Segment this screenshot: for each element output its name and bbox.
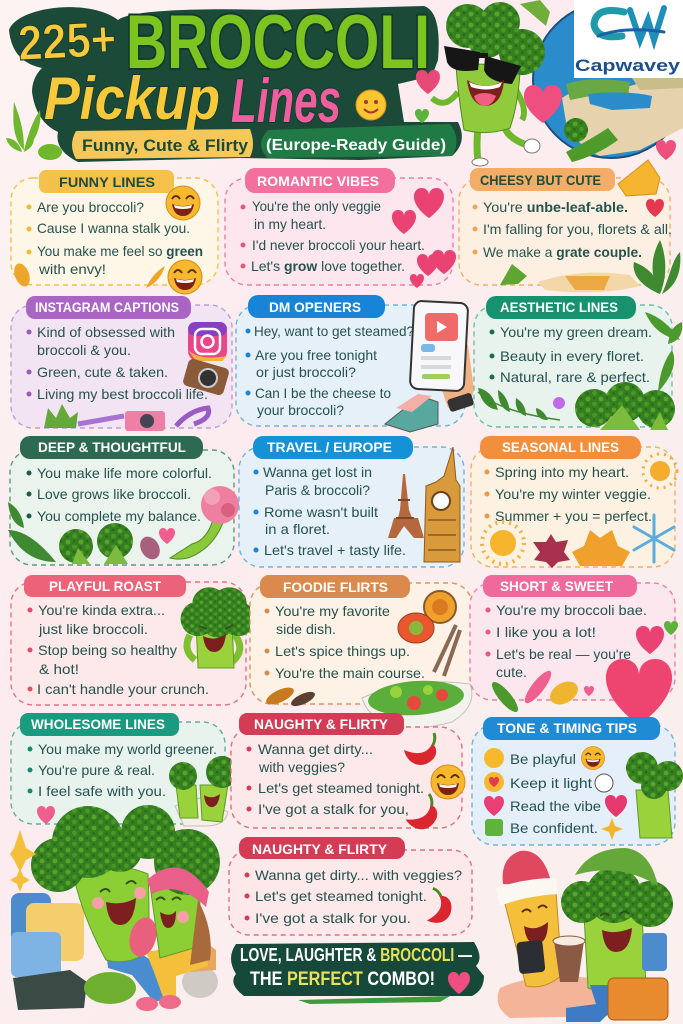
icon: purple sparkle [553,397,565,409]
panel box [11,305,232,428]
icon: heart [646,199,664,217]
panel: romantic vibes [225,168,456,288]
title: Broccoli: BROCCOLI [126,0,430,85]
header: AESTHETIC LINES [500,299,618,315]
lines: Are you free tonight [255,347,377,363]
header: DM OPENERS [269,299,361,315]
icon: sandwich [385,394,438,432]
icon: pink capsule [521,668,555,706]
icon: snowflake [634,515,674,562]
panel: naughty and flirty second [229,837,472,935]
mascot: broccoli with sunglasses [416,2,562,166]
icon: heart [605,795,627,817]
icon: vine [645,312,682,392]
lines: in a floret. [265,521,330,537]
lines [472,199,672,260]
lines: You make my world greener. [38,741,217,757]
blue pants [566,985,620,1022]
header: TONE & TIMING TIPS [497,720,637,736]
icon: pastry board [538,273,640,292]
header: INSTAGRAM CAPTIONS [35,299,179,315]
lines [254,464,406,558]
heart right [524,85,562,123]
lines: I've got a stalk for you. [255,910,411,926]
panel: foodie flirts [250,575,472,728]
lines: Natural, rare & perfect. [500,369,650,385]
icon: big heart [606,659,672,725]
lines: You're kinda extra... [38,602,165,618]
mascot body [456,64,520,133]
lines [28,602,209,697]
lines [246,323,414,418]
pouf [84,972,136,1004]
lines: You're my green dream. [500,324,652,340]
icon: yellow mango [546,677,582,709]
lines: Be confident. [510,820,598,836]
grey rock [182,966,218,998]
lines: Let's spice things up. [275,643,410,659]
icon: branch [478,388,560,420]
header [20,436,203,459]
lines [510,751,601,836]
title block [6,0,462,162]
icon: heart [159,528,175,544]
lines [240,198,425,274]
panel box [250,583,472,704]
title: 225+: 225+ [17,12,117,71]
header [245,168,395,193]
legs [106,942,208,1011]
mascot legs [477,128,530,160]
panel: short and sweet [470,575,678,725]
panel: cheesy but cute [459,160,680,294]
icon: green square [485,819,503,836]
lines: Keep it light [510,775,592,791]
lines [244,867,462,926]
subtitle: europe-ready guide [261,124,457,158]
lines: just like broccoli. [38,621,148,637]
icon: leaf [500,264,527,285]
lines [264,603,425,681]
mascot head [446,2,545,75]
plaid shirt [190,930,216,972]
lines: You make life more colorful. [37,465,212,481]
icon: small sprout [146,266,165,288]
lines: Wanna get dirty... with veggies? [255,867,462,883]
panel box [239,447,464,567]
yellow character [496,851,562,987]
icon: leafy greens [8,502,56,562]
icon: leaf top [520,0,550,26]
icon: sparkle [601,818,623,840]
title backing shape [9,6,462,162]
icon: laughing emoji [166,186,200,220]
icon: camera [182,358,230,396]
icon: hand [438,335,474,408]
header: NAUGHTY & FLIRTY [252,841,388,857]
icon: eiffel tower [388,474,424,538]
pink pouf [498,976,610,1018]
subtitle: funny cute flirty [72,129,253,159]
icon: selfie stick [78,416,124,424]
mascot sunglasses [444,46,521,84]
panel box [472,725,675,845]
illustration: friends with coffee [496,848,673,1022]
panel: funny lines [11,170,218,294]
sparkles [10,830,36,892]
icon: green heart [664,621,678,635]
lines: You're my winter veggie. [495,486,651,502]
icon: salad bowl [362,678,472,728]
lines: You're the only veggie [252,198,381,214]
panel: travel europe [239,436,464,567]
lines: Hey, want to get steamed? [254,323,414,339]
lines: Read the vibe [510,798,601,814]
icon: speech bubble [595,774,613,792]
lines: Stop being so healthy [38,642,177,658]
header: ROMANTIC VIBES [257,173,379,189]
icon: pink camera [125,411,165,431]
panel: wholesome lines [11,713,225,824]
lines: You complete my balance. [37,508,201,524]
lines: Are you broccoli? [37,199,144,215]
lines: with envy! [38,261,106,277]
lines: You're unbe-leaf-able. [483,199,628,215]
icon: big sun [482,522,524,564]
panel box [229,850,472,935]
brush stroke [298,996,450,1004]
lines: Let's get steamed tonight. [258,780,424,796]
subtitle: europe-ready guide: (Europe-Ready Guide) [266,137,446,154]
icon: utensils [434,625,460,676]
panel: dm openers [236,295,475,432]
lines: broccoli & you. [37,342,131,358]
heart small green [415,109,429,123]
lines [490,324,652,385]
header [483,575,637,597]
panel box [474,305,672,427]
logo: capwavey [574,0,683,78]
panel box [459,178,670,285]
icon: heart [37,806,55,824]
icon: chili [404,733,436,765]
panel: naughty and flirty [231,713,465,834]
panel: aesthetic lines [474,296,682,430]
icon: green pod [488,679,522,715]
lines [26,465,212,524]
panel box [11,722,225,824]
header: CHEESY BUT CUTE [480,172,601,188]
lines: Cause I wanna stalk you. [37,220,190,236]
icon: purple bean [136,533,164,563]
icon: sprout [6,102,62,160]
banner shape [231,942,484,996]
banner line one: LOVE, LAUGHTER & BROCCOLI — [240,945,472,965]
lines [28,741,217,799]
partner body [150,878,211,965]
lines: Rome wasn't built [264,504,378,520]
icon: heart [636,626,664,654]
lines: You're pure & real. [38,762,155,778]
header [470,168,615,191]
icon: orange leaf [11,261,33,289]
icon: hearts [392,188,456,288]
lines: You're my broccoli bae. [496,602,647,618]
illustration: globe [533,2,683,158]
lines: side dish. [276,621,336,637]
icon: cheese [618,160,660,196]
subtitle: funny cute flirty: Funny, Cute & Flirty [82,136,249,155]
header: SHORT & SWEET [500,578,613,594]
lines: with veggies? [258,759,345,775]
header [248,295,385,318]
pink oval [125,914,161,960]
panel box [11,178,218,285]
coffee cup [553,936,585,982]
panel: playful roast [11,575,255,705]
phone [516,940,545,974]
lines: Living my best broccoli life. [37,386,208,402]
lines: You make me feel so green [37,243,203,259]
lines: Paris & broccoli? [265,482,370,498]
icon: pink floret [170,486,239,559]
suitcase [608,978,668,1020]
icon: pasta [565,276,610,290]
lines: I've got a stalk for you, [258,801,409,817]
lines: I'm falling for you, florets & all. [483,221,672,237]
logo wordmark: Capwavey [575,56,681,75]
header [24,575,186,597]
pillows [11,893,84,977]
lines [484,464,652,524]
header: TRAVEL / EUROPE [267,439,392,455]
panel: deep and thoughtful [8,436,239,565]
panel: instagram captions [11,296,232,431]
illustration: broccoli hug [169,756,238,826]
icon: seeds [264,684,317,709]
heart pink corner [656,140,676,160]
storage box [13,970,87,1010]
lines: Can I be the cheese to [255,385,391,401]
header: DEEP & THOUGHTFUL [38,439,186,455]
lines: Let's grow love together. [251,258,405,274]
header [239,713,404,735]
lines: Kind of obsessed with [37,324,175,340]
icon: fruit slice [424,591,456,623]
header [253,436,413,459]
icon: broccoli [626,752,683,838]
mascot mouth [467,80,504,106]
mascot arms [432,90,524,120]
panel box [471,447,675,567]
lines: I feel safe with you. [38,783,166,799]
lines: or just broccoli? [256,364,356,380]
icon: small sun [643,454,677,488]
heart left [416,70,440,94]
header: FOODIE FLIRTS [283,579,388,595]
header [260,575,410,598]
lines: Spring into my heart. [495,464,629,480]
icon: emoji [484,748,504,768]
lines: Wanna get lost in [263,464,372,480]
icon: watch [447,392,475,412]
header [20,713,179,736]
icon: orange leaves [572,530,630,566]
header: PLAYFUL ROAST [49,578,161,594]
panel: tone and timing tips [472,717,683,845]
lines: your broccoli? [257,402,344,418]
lines: You're the main course. [275,665,425,681]
icon: heart [448,972,470,994]
logo mark [594,8,664,40]
header [480,436,641,459]
lines [26,199,203,277]
lines: cute. [496,664,527,680]
icon: small heart [584,686,594,696]
panel box [225,178,453,285]
header: FUNNY LINES [59,174,155,190]
icon: laughing emoji [581,746,605,770]
icon: chili [400,793,441,834]
header: SEASONAL LINES [502,439,619,455]
icon: broccoli on globe [564,118,618,162]
lines: Let's get steamed tonight. [255,888,427,904]
green cap [575,848,658,886]
icon: laughing emoji [431,765,465,799]
header [239,837,405,859]
header [486,296,636,319]
blue chair pad [642,933,667,971]
panel: seasonal lines [471,436,677,568]
lines: I can't handle your crunch. [37,681,209,697]
icon: smiley [356,90,386,120]
lines: in my heart. [254,216,326,232]
panel box [11,582,246,705]
mascot: laughing broccoli [181,587,255,668]
title: Lines: Lines [231,67,341,136]
icon: heart [484,796,504,816]
panel box [10,450,234,565]
lines: We make a grate couple. [483,244,642,260]
lines: Let's travel + tasty life. [264,542,406,558]
icon: plant [44,404,78,428]
lines: Summer + you = perfect. [495,508,652,524]
header [26,296,191,319]
lines [246,741,424,817]
icon: laughing emoji [168,260,202,294]
lines: I'd never broccoli your heart. [252,237,425,253]
header [39,170,174,193]
icon: big ben [424,447,460,562]
lines [26,324,208,402]
broccoli character [561,867,673,992]
illustration: broccoli couple on sofa [10,805,220,1011]
panel box [236,305,465,426]
lines: & hot! [39,661,79,677]
icon: chili [415,887,458,930]
icon: phone [410,301,468,391]
icon: broccoli pair [59,523,133,564]
header: WHOLESOME LINES [31,716,165,732]
lines: Green, cute & taken. [37,364,168,380]
lines [486,602,647,680]
lines: Be playful [510,751,576,767]
banner line two: THE PERFECT COMBO! [250,969,435,990]
icon: instagram [188,322,227,361]
lines: You're my favorite [275,603,390,619]
lines: Let's be real — you're [496,646,631,662]
lines: Love grows like broccoli. [37,486,191,502]
title: Pickup: Pickup [44,65,220,132]
panel box [470,583,675,700]
icon: broccoli trio [575,382,675,430]
panel box [231,727,462,828]
banner: love laughter broccoli [231,942,484,1004]
lines: Wanna get dirty... [258,741,373,757]
header [483,717,660,740]
icon: leaves [634,240,680,294]
partner hat [147,868,209,907]
main body [74,867,149,962]
icon: emoji heart [484,772,504,792]
lines: I like you a lot! [496,624,596,640]
icon: tomato [398,613,434,643]
header: NAUGHTY & FLIRTY [254,716,389,732]
icon: red leaf [533,534,570,568]
icon: purple ribbon [176,408,209,426]
main broccoli head [31,805,220,895]
lines: Beauty in every floret. [500,348,644,364]
